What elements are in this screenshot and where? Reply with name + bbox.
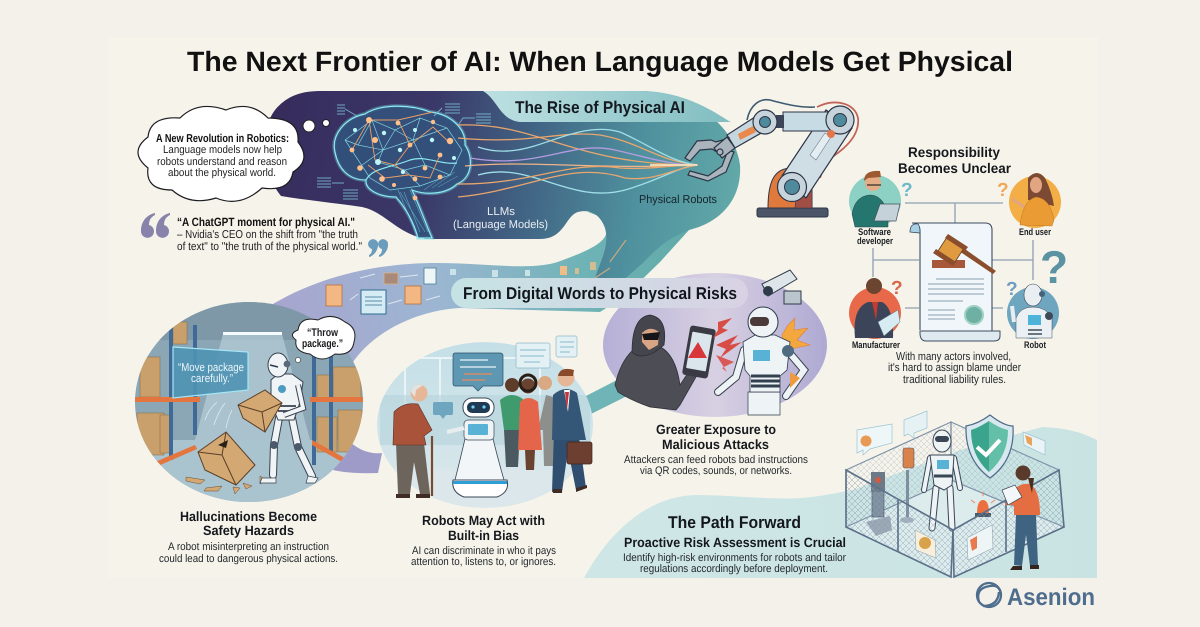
purple connector piece	[333, 442, 382, 473]
question marks	[891, 180, 1068, 300]
logo: Asenion: Asenion	[1007, 584, 1095, 611]
illustration: malicious attack scene	[615, 270, 810, 415]
text: hallucinations become safety hazards	[159, 509, 338, 565]
icon: shield with check	[966, 415, 1013, 478]
text: many actors: it's hard to assign blame under	[888, 362, 1021, 374]
icon: opening quote mark	[141, 213, 170, 238]
logo: Asenion	[977, 583, 1095, 611]
body text: Identify high-risk environments for robots and tailor	[623, 552, 846, 564]
labels: actors	[852, 227, 1051, 351]
instruction screen	[173, 347, 248, 398]
callout: new revolution in robotics: about the physical world.	[168, 167, 276, 179]
cards	[857, 411, 1045, 455]
labels: actors: Software	[858, 227, 891, 238]
label: LLMs: (Language Models)	[453, 219, 548, 231]
background panel	[108, 37, 1098, 578]
quote block	[141, 213, 388, 257]
question marks: ?	[901, 180, 913, 201]
icon: manufacturer	[849, 278, 901, 339]
quote block: of text" to "the truth of the physical world."	[177, 241, 362, 253]
quote block: – Nvidia's CEO on the shift from "the truth	[177, 229, 358, 241]
illustration: bias scene	[377, 342, 593, 508]
labels: actors: End user	[1019, 227, 1051, 238]
heading: Responsibility	[908, 144, 1000, 160]
text: hallucinations become safety hazards: Safety Hazards	[203, 523, 294, 538]
text: greater exposure to malicious attacks: Attackers can feed robots bad instructions	[624, 454, 808, 466]
text: many actors: With many actors involved,	[896, 351, 1011, 363]
text: hallucinations become safety hazards: Hallucinations Become	[180, 509, 317, 524]
panel: the path forward	[584, 411, 1097, 578]
chart: converging data streams	[458, 125, 698, 197]
text: robots may act with built-in bias: Built-in Bias	[448, 528, 519, 543]
text: greater exposure to malicious attacks	[624, 422, 808, 477]
panel: responsibility becomes unclear	[849, 144, 1068, 386]
text: many actors: traditional liability rules.	[903, 374, 1006, 386]
text: many actors	[888, 351, 1021, 386]
speech bubbles: group	[516, 336, 577, 368]
title: The Next Frontier of AI: When Language Models Get Physical	[187, 46, 1013, 77]
teal connector piece	[584, 380, 629, 415]
inspector with clipboard	[1002, 466, 1040, 570]
infographic canvas	[135, 50, 1097, 608]
illustration: people and robot	[393, 336, 592, 498]
label: physical robots: Physical Robots	[639, 194, 717, 206]
heading	[898, 144, 1012, 176]
icon: end user	[1009, 173, 1061, 228]
icon: legal document with gavel	[910, 223, 1000, 341]
labels: actors: developer	[857, 236, 893, 247]
heading pill	[451, 278, 748, 308]
callout: throw package: package.”	[302, 338, 343, 350]
icon: closing quote mark	[368, 239, 388, 257]
icon: robot actor	[1007, 284, 1059, 339]
dark blob with brain background	[264, 91, 740, 285]
callout: new revolution in robotics: A New Revolution in Robotics:	[156, 133, 289, 145]
icon: logo mark	[977, 583, 1001, 607]
question marks: ?	[997, 180, 1009, 201]
text: greater exposure to malicious attacks: Greater Exposure to	[656, 422, 776, 437]
icon: glowing brain	[334, 106, 470, 238]
question marks: ?	[1006, 279, 1018, 300]
subheading: Proactive Risk Assessment is Crucial	[624, 535, 846, 550]
speech bubble: small	[433, 402, 453, 419]
question marks: ?	[891, 278, 903, 299]
labels: actors: Robot	[1024, 340, 1047, 351]
text: robots may act with built-in bias: AI can discriminate in who it pays	[412, 545, 556, 557]
speech bubble: robot	[453, 353, 503, 391]
teal background shape	[584, 427, 1097, 578]
heading: Becomes Unclear	[898, 160, 1012, 176]
labels: actors: Manufacturer	[852, 340, 900, 351]
callout: throw package: “Throw	[307, 327, 338, 339]
old man	[393, 384, 432, 498]
heading tab: the rise of physical AI: The Rise of Physical AI	[515, 98, 685, 117]
question marks: ?	[1040, 241, 1068, 293]
heading pill: From Digital Words to Physical Risks	[463, 284, 737, 303]
icon: robot carrying box	[238, 353, 318, 483]
sensor post	[866, 472, 892, 536]
body text: regulations accordingly before deployment.	[640, 563, 828, 575]
illustration: warehouse hallucination scene	[135, 302, 363, 502]
illustration: robotic arm	[685, 100, 858, 217]
icon: document cluster	[326, 266, 567, 314]
callout: new revolution in robotics: Language models now help	[163, 144, 282, 156]
heading: the path forward: The Path Forward	[668, 513, 801, 532]
text: robots may act with built-in bias: Robots May Act with	[422, 513, 545, 528]
icon: lightning bolts	[713, 318, 742, 372]
icon: security camera	[762, 270, 801, 304]
body text	[623, 552, 846, 575]
lower digital-words ribbon	[260, 212, 689, 362]
icon: broken box	[186, 432, 266, 494]
icon: spark burst	[782, 318, 810, 352]
label: LLMs: LLMs	[487, 206, 515, 218]
warning post	[900, 448, 914, 523]
icon: warning tablet	[682, 325, 716, 379]
bystanders	[500, 375, 556, 470]
robot assistant	[447, 398, 508, 497]
attacked robot	[718, 307, 804, 415]
thought bubble dots	[303, 120, 330, 132]
text: hallucinations become safety hazards: A robot misinterpreting an instruction	[168, 541, 329, 553]
connector lines	[873, 203, 1033, 308]
text: robots may act with built-in bias: attention to, listens to, or ignores.	[411, 556, 556, 568]
test robot	[924, 430, 960, 528]
callout: new revolution in robotics	[138, 106, 304, 201]
fence signs	[915, 525, 993, 560]
illustration: fenced robot test area	[846, 411, 1064, 577]
heading tab: the rise of physical AI	[483, 91, 731, 122]
instruction screen: carefully.”	[191, 373, 233, 385]
stream particles	[575, 240, 626, 278]
icon: software developer	[849, 171, 901, 227]
icon: small data list marks	[317, 104, 491, 199]
front fence	[846, 470, 1064, 577]
panel: rise of physical AI ribbon	[260, 91, 740, 362]
text: robots may act with built-in bias	[411, 513, 556, 568]
attack illustration ellipse	[603, 273, 827, 417]
callout: throw package	[292, 316, 355, 359]
text: greater exposure to malicious attacks: via QR codes, sounds, or networks.	[640, 465, 792, 477]
icon: alarm beacon	[971, 492, 995, 517]
quote block: “A ChatGPT moment for physical AI."	[177, 215, 355, 229]
label: LLMs	[453, 206, 548, 231]
man with briefcase	[552, 369, 592, 493]
text: greater exposure to malicious attacks: Malicious Attacks	[662, 437, 769, 452]
instruction screen: “Move package	[178, 362, 244, 374]
callout: new revolution in robotics: robots understand and reason	[157, 156, 287, 168]
hooded attacker	[615, 315, 700, 410]
text: hallucinations become safety hazards: could lead to dangerous physical actions.	[159, 553, 338, 565]
panel: from digital words to physical risks	[326, 266, 827, 473]
